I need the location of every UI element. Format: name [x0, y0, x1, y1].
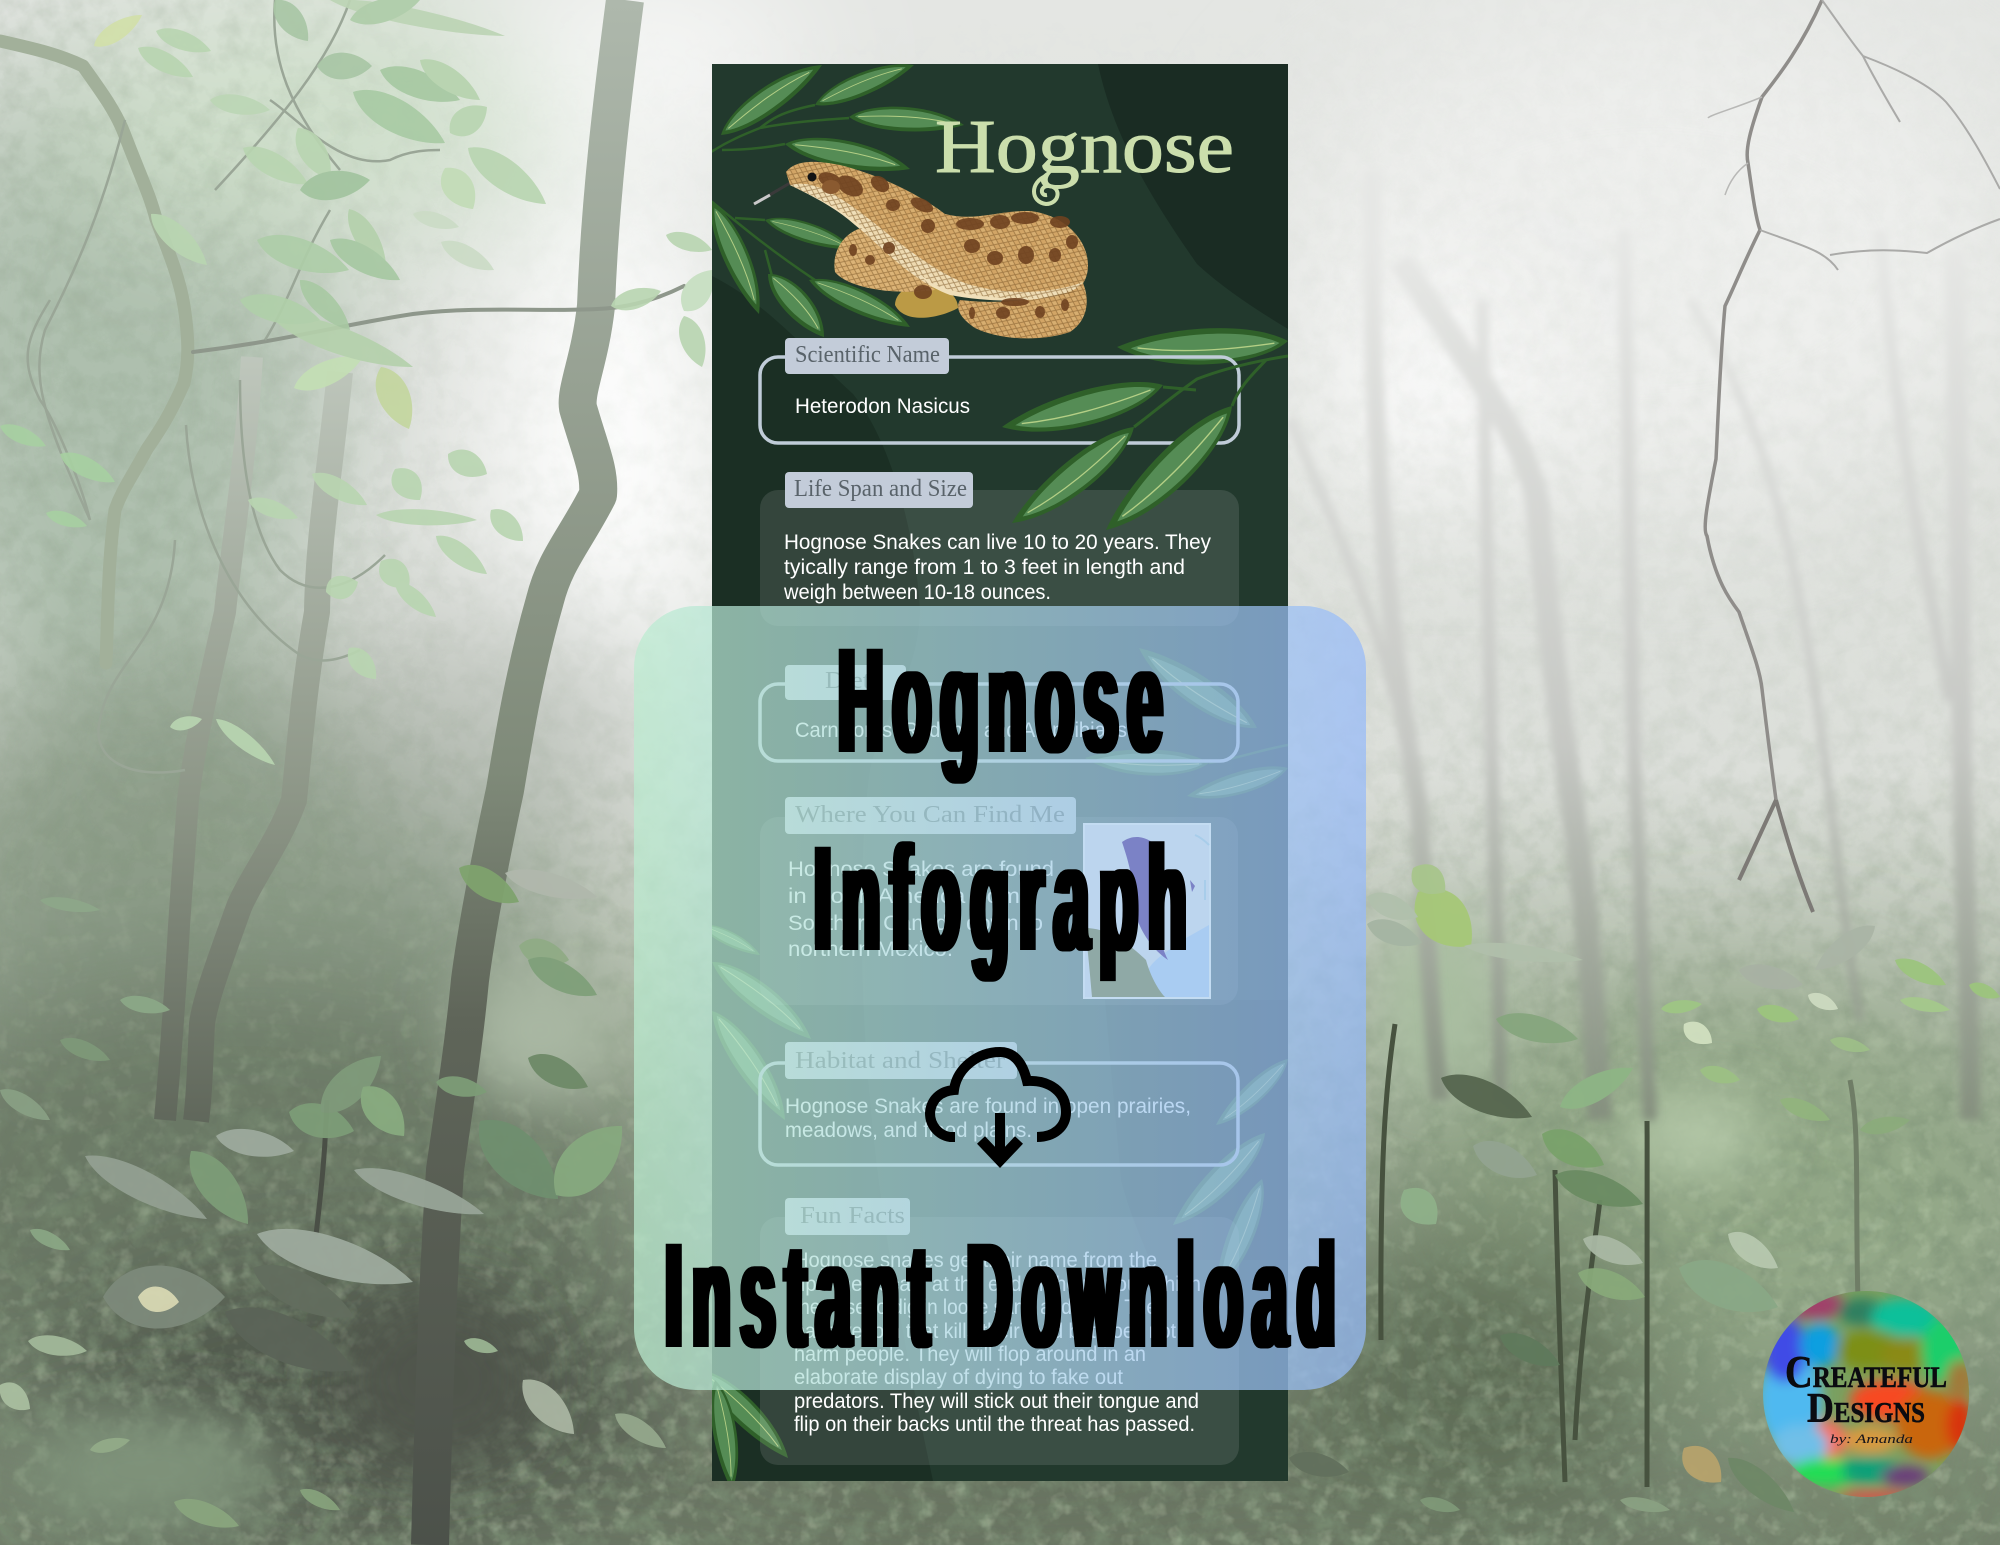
section: fun facts: predators. They will stick out their tongue and: [794, 1390, 1199, 1413]
leaves: right branch foreground: [998, 356, 1288, 545]
bottom-right foliage: [1287, 857, 2000, 1521]
section: habitat and shelter: Habitat and Shelter: [795, 1048, 1005, 1074]
section: habitat and shelter: meadows, and flood plains.: [785, 1119, 1032, 1142]
section: scientific name: Heterodon Nasicus: [795, 395, 970, 418]
leaves: right branch over scientific name: [1116, 326, 1289, 368]
section: fun facts: flip on their backs until the threat has passed.: [794, 1413, 1195, 1436]
heading: Hognose: Hognose: [838, 618, 1172, 785]
heading: Instant Download: Instant Download: [665, 1213, 1345, 1380]
section: habitat and shelter: Hognose Snakes are found in open prairies,: [785, 1095, 1191, 1118]
section: fun facts: elaborate display of dying to fake out: [794, 1366, 1123, 1389]
logo: Createful Designs moon badge: CREATEFUL: [1785, 1346, 1947, 1397]
section: fun facts: Hognose snakes get their name from the: [794, 1249, 1157, 1272]
section: where you can find me: Hognose Snakes are found: [788, 858, 1054, 881]
section: fun facts: [760, 1198, 1239, 1465]
section: where you can find me: northern Mexico.: [788, 938, 953, 961]
map: hognose range: [1084, 824, 1210, 998]
section: life span and size: [760, 472, 1239, 626]
section: diet: [760, 665, 1238, 761]
section: diet: Carnivores: Rodents and Amphibians: [795, 719, 1127, 742]
panel: hognose poster: [692, 53, 1296, 1492]
section: habitat and shelter: [760, 1042, 1238, 1165]
section: life span and size: Hognose Snakes can live 10 to 20 years. They: [784, 531, 1211, 554]
leaves: left branch behind the snake: [712, 200, 910, 337]
section: fun facts: have venom that kills their food but does not: [794, 1320, 1176, 1343]
section: where you can find me: in North America from: [788, 885, 1020, 908]
logo: Createful Designs moon badge: DESIGNS: [1807, 1386, 1925, 1432]
logo: Createful Designs moon badge: [1758, 1288, 1974, 1503]
illustration: coiled hognose snake: [754, 162, 1088, 338]
section: life span and size: Life Span and Size: [794, 476, 967, 502]
leaves: bottom-left corner: [712, 1373, 788, 1481]
section: fun facts: harm people. They will flop around in an: [794, 1343, 1146, 1366]
leaves: top-left branch: [712, 64, 964, 172]
section: fun facts: upturned scale at the end of their snout which: [794, 1273, 1201, 1296]
section: life span and size: weigh between 10-18 ounces.: [783, 581, 1051, 604]
section: life span and size: tyically range from 1 to 3 feet in length and: [784, 556, 1185, 579]
section: fun facts: they use to dig in loose sand and mud. The: [794, 1296, 1157, 1319]
leaves: faded branches under overlay: [697, 637, 1296, 1297]
section: scientific name: [760, 338, 1239, 443]
title: Hognose: Hognose: [935, 105, 1234, 189]
logo: Createful Designs moon badge: by: Amanda: [1830, 1431, 1914, 1446]
bottom-left big leaves: [0, 855, 671, 1536]
section: where you can find me: Where You Can Find Me: [795, 802, 1065, 828]
icon: cloud download: [930, 1052, 1066, 1160]
heading: Infograph: Infograph: [814, 816, 1197, 983]
section: fun facts: Fun Facts: [800, 1203, 905, 1229]
top-left pale leaves: [0, 0, 723, 771]
section: scientific name: Scientific Name: [795, 342, 940, 368]
section: where you can find me: [760, 797, 1238, 1005]
panel: translucent gradient overlay: [634, 606, 1366, 1390]
section: diet: Diet: [825, 668, 870, 694]
section: where you can find me: Southern Canada down to: [788, 912, 1043, 935]
